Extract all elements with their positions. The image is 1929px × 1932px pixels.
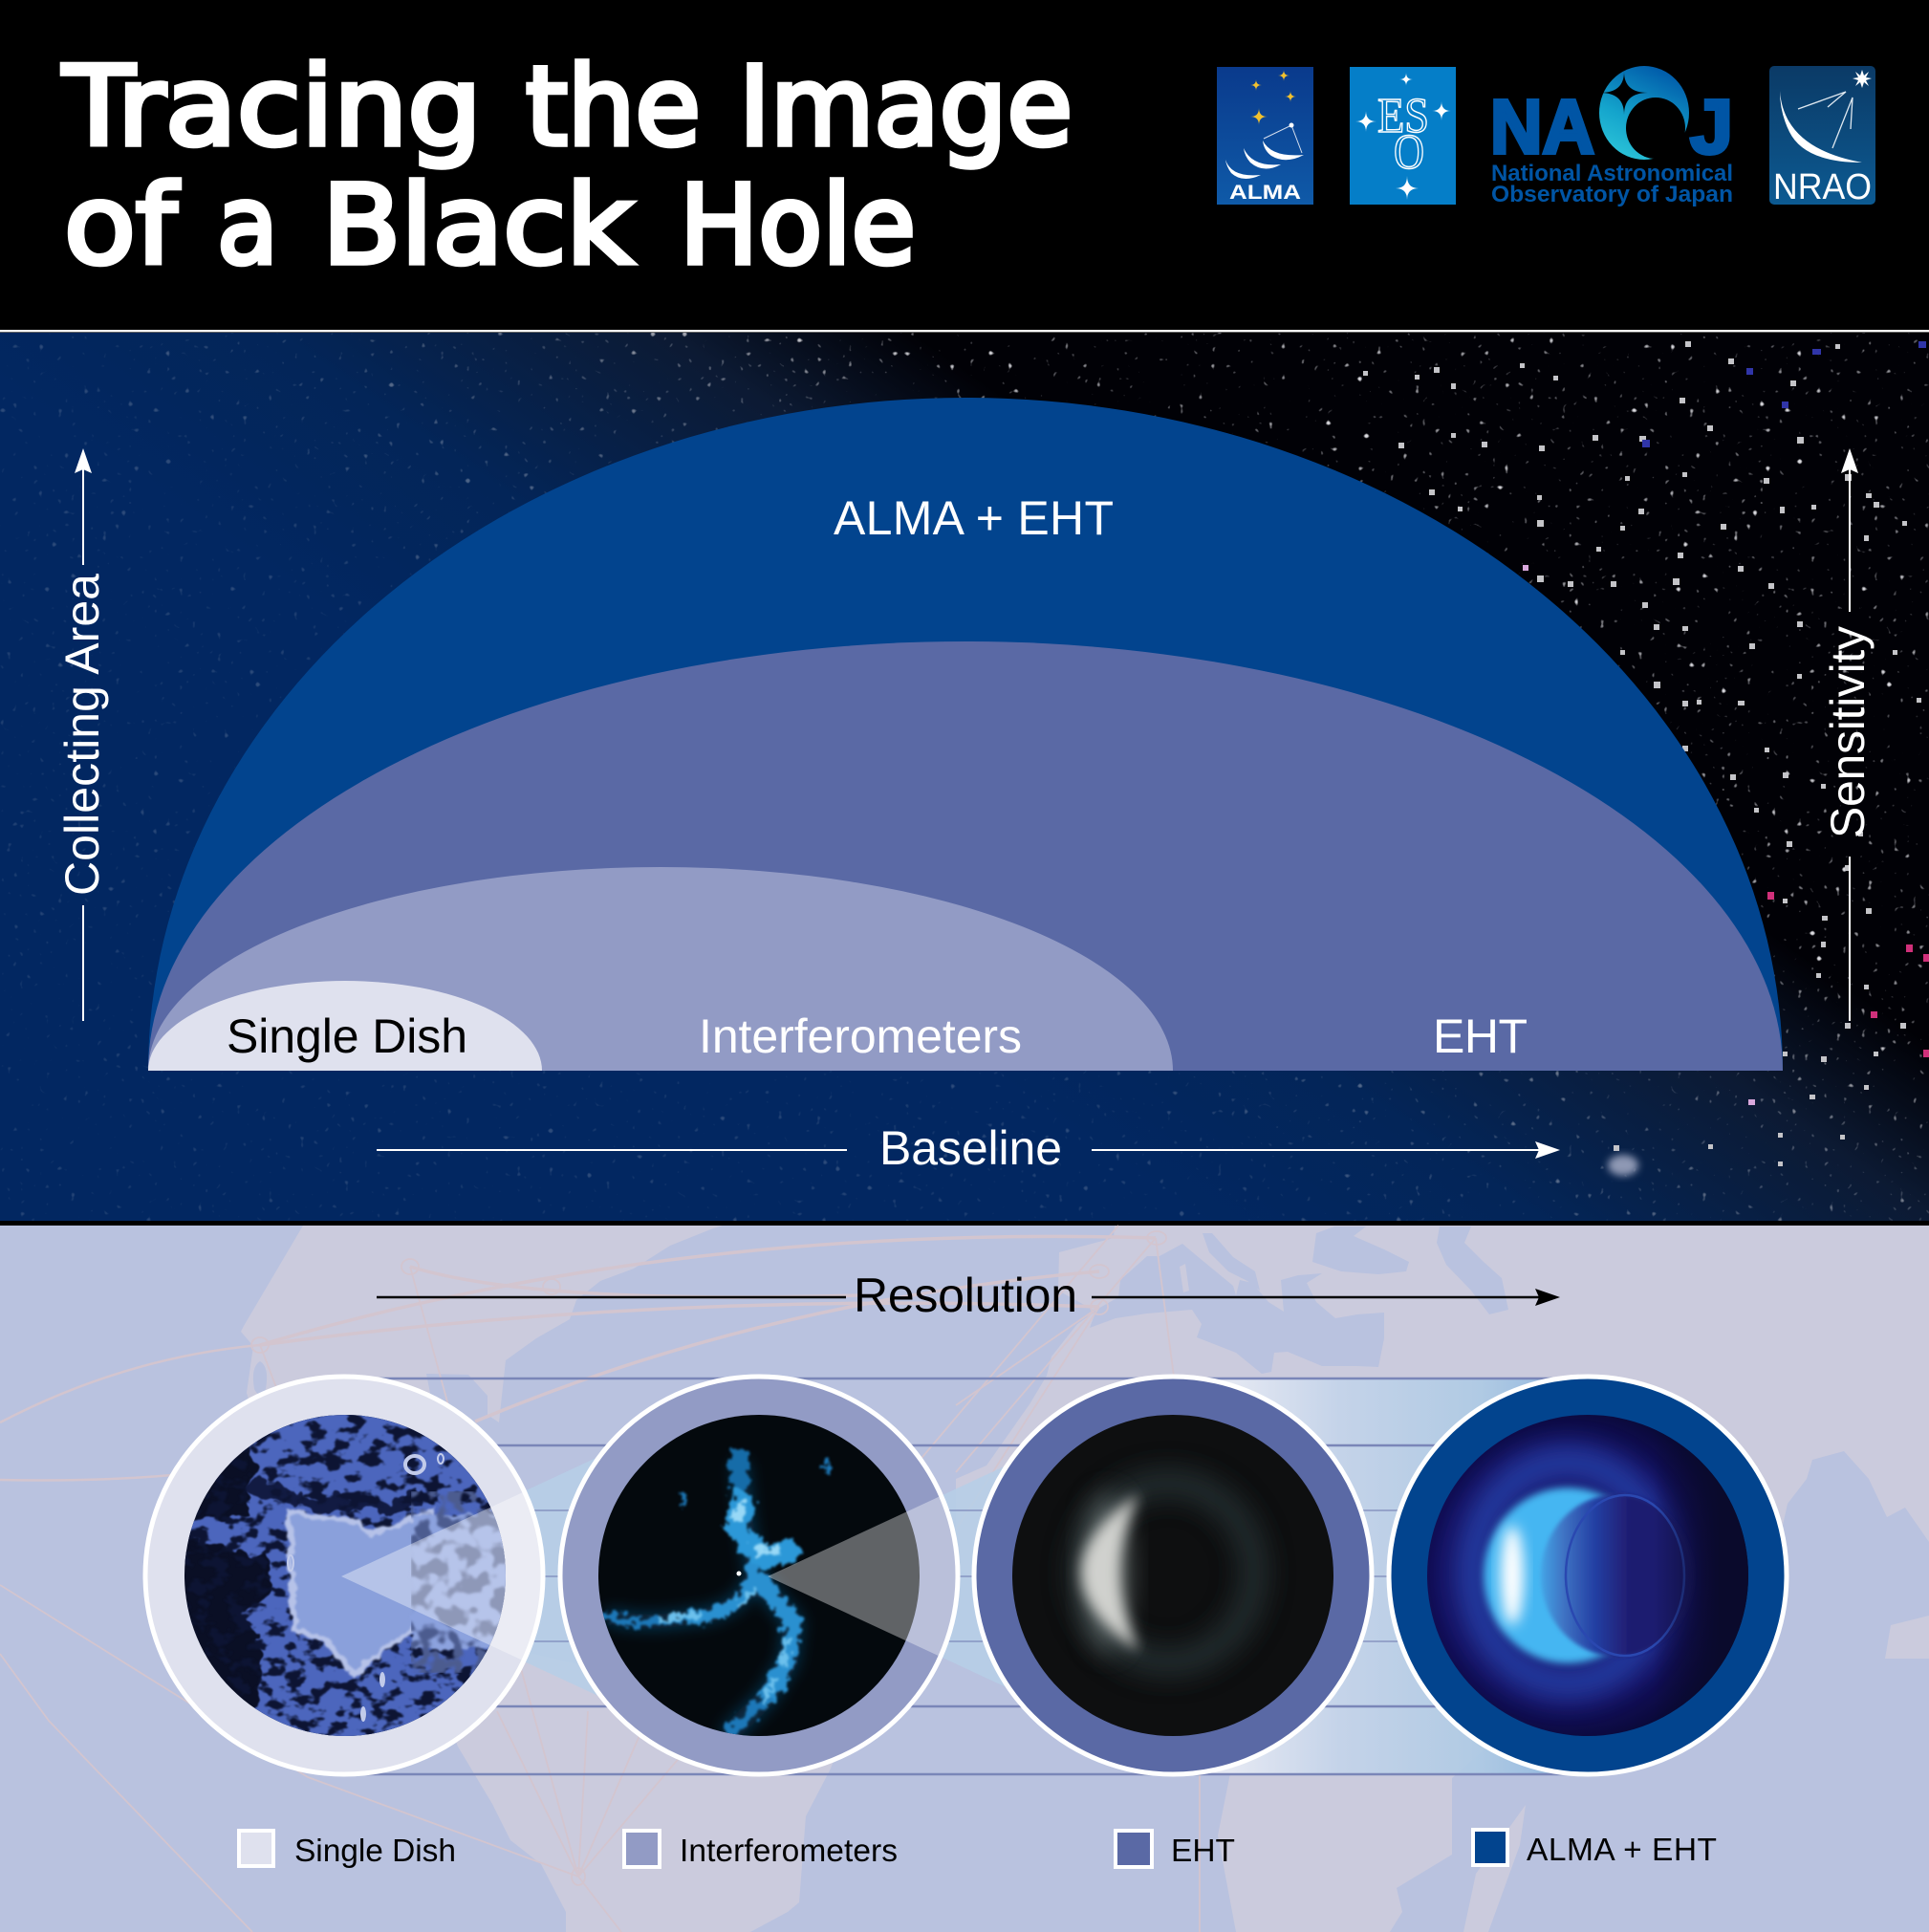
title: of (64, 162, 180, 289)
logo: ESO: O (1394, 125, 1424, 180)
circle: ALMA + EHT (1389, 1377, 1787, 1774)
axis: Sensitivity: Sensitivity (1821, 626, 1875, 838)
axis: Collecting Area (55, 448, 109, 1021)
image: single dish map (184, 1415, 506, 1736)
image: interferometer map (598, 1415, 920, 1736)
beam wedge (341, 1493, 541, 1660)
title: a (217, 162, 278, 289)
legend item: EHT: EHT (1171, 1834, 1235, 1869)
panel: starfield background (0, 333, 1929, 1221)
panel: resolution background with world map (0, 1226, 1929, 1932)
axis: Resolution: Resolution (854, 1269, 1077, 1322)
logo: NRAO (1769, 66, 1875, 207)
logo: ESO (1350, 67, 1456, 205)
axis: Collecting Area: Collecting Area (55, 574, 109, 896)
label: ALMA + EHT: ALMA + EHT (834, 491, 1114, 545)
title: Tracing (62, 43, 482, 170)
circle: Single Dish (143, 1375, 545, 1776)
logo: ALMA: ALMA (1229, 182, 1301, 204)
image: EHT black hole crescent (1012, 1415, 1333, 1736)
nebula smudge (1608, 1155, 1638, 1176)
dome: Single Dish (148, 981, 542, 1071)
dome: ALMA + EHT (148, 398, 1783, 1071)
chart: nested domes (148, 398, 1783, 1071)
axis: Resolution (377, 1269, 1560, 1322)
gradient band between EHT and ALMA + EHT (1173, 1378, 1588, 1774)
circle: EHT (974, 1377, 1372, 1774)
legend item: Interferometers: Interferometers (680, 1834, 898, 1869)
label: Single Dish: Single Dish (227, 1009, 467, 1063)
logo: ALMA (1217, 67, 1313, 205)
legend item: Single Dish: Single Dish (294, 1834, 456, 1869)
logo: NAOJ: National Astronomical (1491, 161, 1733, 186)
circle: Interferometers (558, 1375, 960, 1776)
dome: EHT (148, 641, 1783, 1071)
beam cones between circles (341, 1379, 1185, 1773)
legend item: EHT (1116, 1831, 1235, 1869)
legend item: ALMA + EHT: ALMA + EHT (1527, 1833, 1717, 1868)
network lines between telescopes (0, 1226, 1200, 1932)
label: Interferometers: Interferometers (699, 1009, 1022, 1063)
title: Hole (680, 162, 916, 289)
legend (239, 1830, 1717, 1869)
logo: NAOJ: Observatory of Japan (1491, 182, 1733, 207)
coloured stars (1767, 892, 1929, 1057)
axis: Sensitivity (1821, 448, 1875, 1021)
beam wedge (768, 1497, 956, 1656)
logo: NRAO: NRAO (1773, 167, 1872, 207)
logo: NAOJ: NA (1490, 84, 1594, 169)
dome: Interferometers (148, 867, 1173, 1071)
title: Image (739, 43, 1073, 170)
label: EHT: EHT (1433, 1009, 1528, 1063)
title: the (526, 43, 701, 170)
image: ALMA + EHT black hole crescent (1427, 1415, 1749, 1736)
panel: header background (0, 0, 1929, 334)
legend item: Single Dish (239, 1831, 456, 1869)
axis: Baseline: Baseline (879, 1121, 1062, 1175)
logo: ESO: ES (1377, 89, 1429, 143)
bright stars (1363, 341, 1921, 1238)
axis: Baseline (377, 1121, 1560, 1175)
title: Black (322, 162, 633, 289)
baseline tracks (345, 1378, 1588, 1774)
logo: NAOJ: J (1690, 84, 1733, 169)
logo: NAOJ (1490, 66, 1733, 207)
title (62, 43, 1073, 289)
